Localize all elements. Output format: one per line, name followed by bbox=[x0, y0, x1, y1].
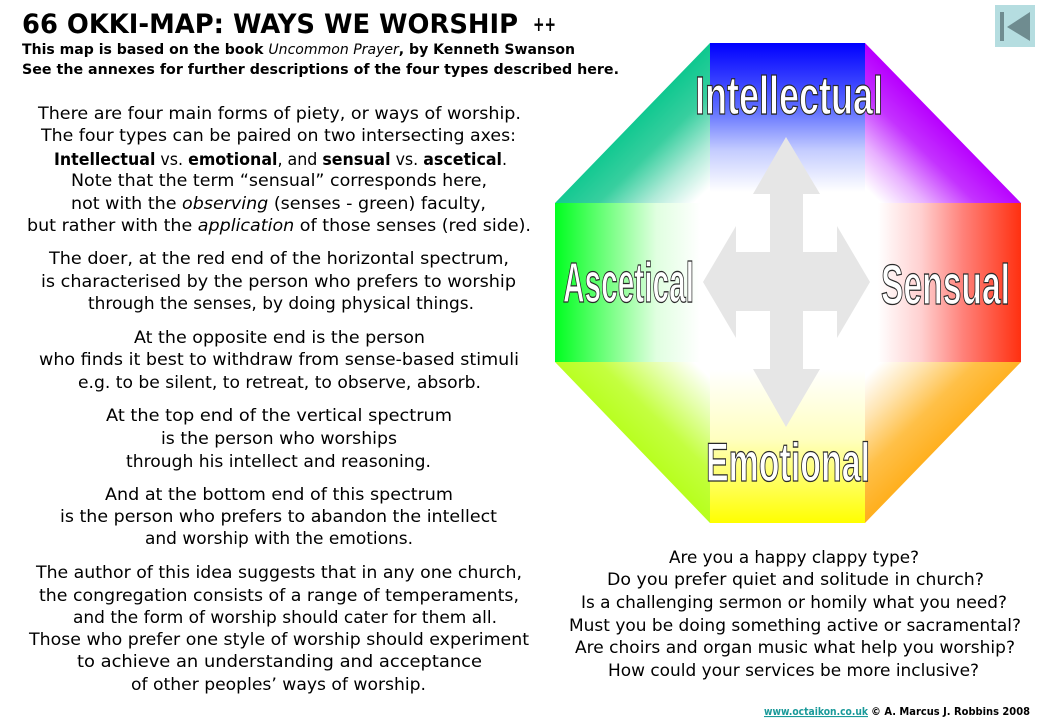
text block: reflective questions: Do you prefer quiet and solitude in church? bbox=[607, 570, 984, 590]
text block: opposite end: who finds it best to withdraw from sense-based stimuli bbox=[39, 350, 519, 370]
text block: the doer: The doer, at the red end of the horizontal spectrum, bbox=[48, 249, 509, 269]
text block: bottom of spectrum: And at the bottom end of this spectrum bbox=[105, 485, 453, 505]
text block: reflective questions: Is a challenging sermon or homily what you need? bbox=[581, 593, 1007, 613]
text block: top of vertical spectrum: is the person who worships bbox=[161, 429, 397, 449]
footer credit bbox=[764, 705, 1030, 718]
title: ++ bbox=[533, 12, 556, 36]
text block: top of vertical spectrum: At the top end of the vertical spectrum bbox=[106, 406, 452, 426]
text block: author's suggestion: Those who prefer one style of worship should experiment bbox=[28, 630, 529, 650]
text block: reflective questions: How could your services be more inclusive? bbox=[608, 661, 979, 681]
text block: author's suggestion: and the form of worship should cater for them all. bbox=[73, 608, 497, 628]
text block: reflective questions: Are choirs and organ music what help you worship? bbox=[575, 638, 1015, 658]
text block: the doer: through the senses, by doing physical things. bbox=[88, 294, 474, 314]
text block: four forms of piety: Note that the term “sensual” corresponds here, bbox=[71, 171, 487, 191]
text block: author's suggestion: the congregation consists of a range of temperaments, bbox=[39, 586, 519, 606]
title: 66 OKKI-MAP: WAYS WE WORSHIP bbox=[22, 9, 518, 40]
text block: four forms of piety: not with the observing (senses - green) faculty, bbox=[71, 194, 486, 214]
text block: four forms of piety: Intellectual vs. emotional, and sensual vs. ascetical. bbox=[54, 150, 507, 170]
text block: top of vertical spectrum bbox=[106, 406, 452, 472]
text block: four forms of piety: There are four main forms of piety, or ways of worship. bbox=[37, 104, 521, 124]
octagon diagram bbox=[555, 43, 1021, 523]
text block: bottom of spectrum bbox=[60, 485, 497, 549]
subtitle: This map is based on the book Uncommon Prayer, by Kenneth Swanson bbox=[22, 42, 575, 58]
text block: author's suggestion: to achieve an understanding and acceptance bbox=[77, 652, 482, 672]
panel: bottom-right orange corner bbox=[865, 362, 1021, 523]
text block: author's suggestion bbox=[28, 563, 529, 695]
subtitle bbox=[22, 42, 619, 78]
text block: four forms of piety bbox=[27, 104, 531, 236]
label: Intellectual: Intellectual bbox=[695, 66, 883, 126]
panel: top-right purple corner bbox=[865, 43, 1021, 203]
icon: back navigation button bbox=[995, 5, 1035, 47]
text block: reflective questions: Are you a happy clappy type? bbox=[669, 548, 919, 568]
panel: bottom-left lime corner bbox=[555, 362, 710, 523]
footer credit: www.octaikon.co.uk bbox=[764, 705, 869, 718]
panel: bottom yellow band bbox=[710, 362, 865, 523]
label: Ascetical: Ascetical bbox=[563, 251, 694, 315]
text block: the doer: is characterised by the person who prefers to worship bbox=[41, 272, 516, 292]
subtitle: See the annexes for further descriptions of the four types described here. bbox=[22, 62, 619, 78]
text block: author's suggestion: The author of this idea suggests that in any one church, bbox=[35, 563, 522, 583]
text block: four forms of piety: but rather with the application of those senses (red side). bbox=[27, 216, 531, 236]
text block: opposite end: At the opposite end is the person bbox=[134, 328, 425, 348]
panel: top-left teal corner bbox=[555, 43, 710, 203]
label: Emotional: Emotional bbox=[706, 431, 870, 493]
text block: reflective questions bbox=[569, 548, 1021, 681]
panel: top blue band bbox=[710, 43, 865, 203]
text block: author's suggestion: of other peoples’ ways of worship. bbox=[131, 675, 426, 695]
arrow: four-way grey cross bbox=[703, 137, 870, 427]
text block: bottom of spectrum: is the person who prefers to abandon the intellect bbox=[60, 507, 497, 527]
text block: reflective questions: Must you be doing something active or sacramental? bbox=[569, 616, 1021, 636]
text block: four forms of piety: The four types can be paired on two intersecting axes: bbox=[40, 126, 516, 146]
text block: opposite end bbox=[39, 328, 519, 393]
text block: the doer bbox=[41, 249, 516, 314]
panel: right red band bbox=[865, 203, 1021, 362]
text block: bottom of spectrum: and worship with the emotions. bbox=[145, 529, 413, 549]
panel: left green band bbox=[555, 203, 710, 362]
text block: opposite end: e.g. to be silent, to retreat, to observe, absorb. bbox=[78, 373, 481, 393]
text block: top of vertical spectrum: through his intellect and reasoning. bbox=[126, 452, 431, 472]
